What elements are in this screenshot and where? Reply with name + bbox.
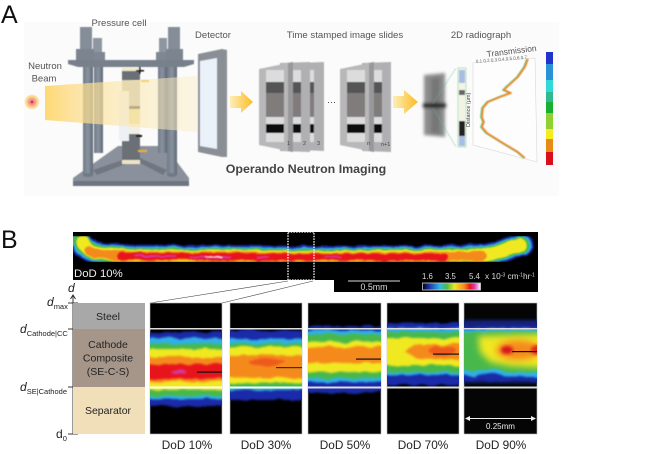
zoom region dotted box [288,232,314,280]
axis ticks: 0.1 0.2 0.3 0.4 0.5 0.6 0.7 [476,55,528,64]
scale bar 0.5mm [348,280,400,292]
colour scale legend: x 10 [485,271,501,281]
layer: Separator [73,387,145,434]
layer: Cathode Composite: (SE-C-S) [87,366,129,378]
transmission chart [466,43,537,162]
slide numbers and ellipsis [287,97,390,148]
layer: Steel [73,303,145,329]
layer: Cathode Composite: Cathode [88,339,128,351]
depth axis [68,295,78,434]
caption row: DoD 30% [241,438,292,452]
slide numbers and ellipsis: 3 [317,141,320,147]
colour scale legend: cm [505,271,519,281]
label: Pressure cell: Pressure cell [92,18,146,29]
colour scale legend: -1 [530,272,535,278]
arrow: detector to slides [230,91,253,113]
colour scale legend [422,271,535,290]
slide numbers and ellipsis: 2 [303,141,306,147]
axis labels: Cathode|CC [27,329,68,338]
slide numbers and ellipsis: 1 [287,141,290,147]
heat map DoD 30% [230,302,302,434]
neutron source icon [25,95,39,109]
caption row: DoD 70% [398,438,449,452]
axis label: Distance: Distance (μm) [466,92,472,127]
transmission curve [481,59,528,158]
2D radiograph image [423,73,446,137]
axis labels [20,281,75,443]
full-cell heat map [73,232,538,292]
scale arrow 0.25mm: 0.25mm [486,422,515,431]
slide numbers and ellipsis: ··· [327,97,336,107]
detector [198,49,227,157]
arrow: slides to radiograph [393,90,418,114]
axis labels: d [20,380,27,394]
label: Neutron Beam: Neutron [28,61,62,72]
slide numbers and ellipsis: n+1 [381,142,390,148]
colour scale legend: -3 [501,272,505,278]
axis labels: d [20,322,27,336]
axis labels: SE|Cathode [27,387,67,396]
pressure cell apparatus [68,27,194,186]
colour scale legend: 3.5 [445,272,457,281]
label: DoD 10%: DoD 10% [74,268,123,280]
title: Operando Neutron Imaging: Operando Neutron Imaging [226,162,386,176]
heat map DoD 50% [308,302,382,434]
scale bar 0.5mm: 0.5mm [361,282,387,292]
label: Transmission: Transmission [486,43,537,59]
colour scale legend: 5.4 [469,272,481,281]
layer: Cathode Composite: Composite [83,352,133,364]
caption row [162,438,527,452]
layer: Separator: Separator [85,405,132,417]
caption row: DoD 10% [162,438,213,452]
label: Detector: Detector [195,30,231,41]
axis labels: d [56,427,63,441]
caption row: DoD 90% [476,438,527,452]
slide numbers and ellipsis: n [367,141,370,147]
colour scale legend: 1.6 [422,272,433,281]
label: Neutron Beam: Beam [32,74,56,84]
zoom connector lines [150,281,313,303]
axis labels: d [68,281,75,295]
caption row: DoD 50% [320,438,371,452]
neutron beam [45,76,197,132]
panel label A: A [1,1,18,29]
heat map DoD 10% [150,302,222,434]
panel label B: B [1,226,18,254]
label: 2D radiograph: 2D radiograph [451,30,511,41]
label: Time stamped image slides: Time stamped image slides [287,30,403,41]
layer: Steel: Steel [96,311,120,323]
time stamped image slides [259,62,391,152]
layer: Cathode Composite [73,329,145,387]
colour scale legend: -1 [519,272,523,278]
transmission colour bar [546,52,553,165]
radiograph zoom strip [433,68,466,147]
colour scale legend: hr [523,271,531,281]
panel A: operando neutron imaging background [24,22,559,196]
heat map DoD 90% [464,302,538,434]
axis labels: max [54,302,68,311]
axis labels: d [47,295,54,309]
axis labels: 0 [63,434,67,443]
heat map DoD 70% [386,302,460,434]
